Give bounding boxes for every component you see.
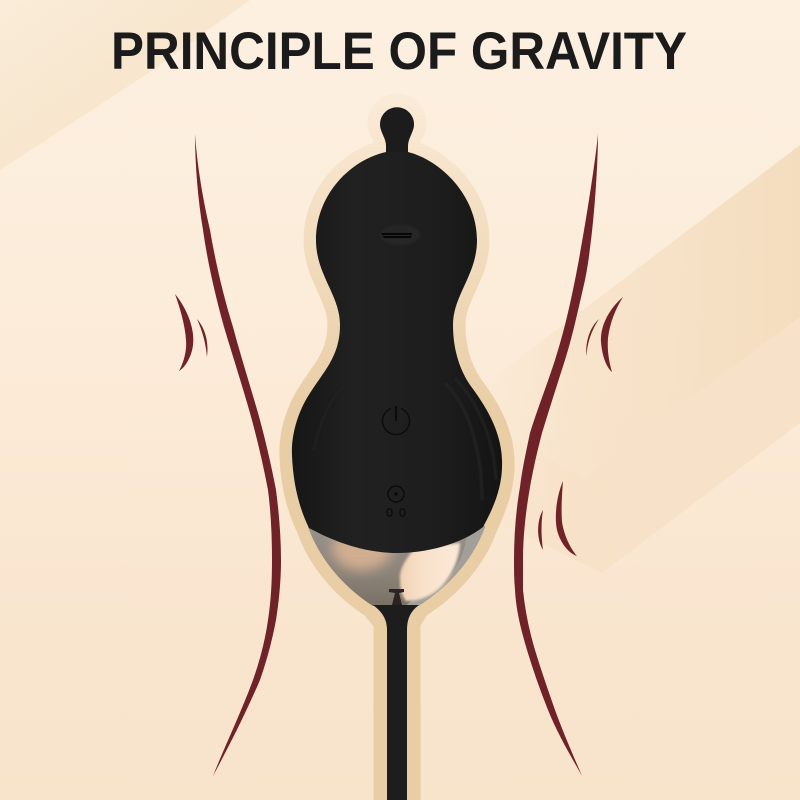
metal bowl (308, 525, 485, 606)
charging contacts (387, 509, 405, 516)
title: PRINCIPLE OF GRAVITY (111, 22, 687, 81)
body ribs (455, 380, 496, 499)
stem and flare (373, 605, 419, 800)
power button icon (382, 406, 410, 435)
right upper vibration marks (586, 297, 623, 372)
right lower vibration marks (538, 481, 577, 556)
mouth slit (380, 225, 420, 245)
small button icon (388, 486, 404, 502)
left body contour line (195, 134, 281, 776)
device body (292, 152, 502, 553)
bowl pin (389, 589, 404, 605)
right body contour line (514, 134, 598, 776)
left vibration marks (175, 294, 208, 371)
device top knob (380, 107, 414, 160)
device halo outline (292, 106, 502, 800)
